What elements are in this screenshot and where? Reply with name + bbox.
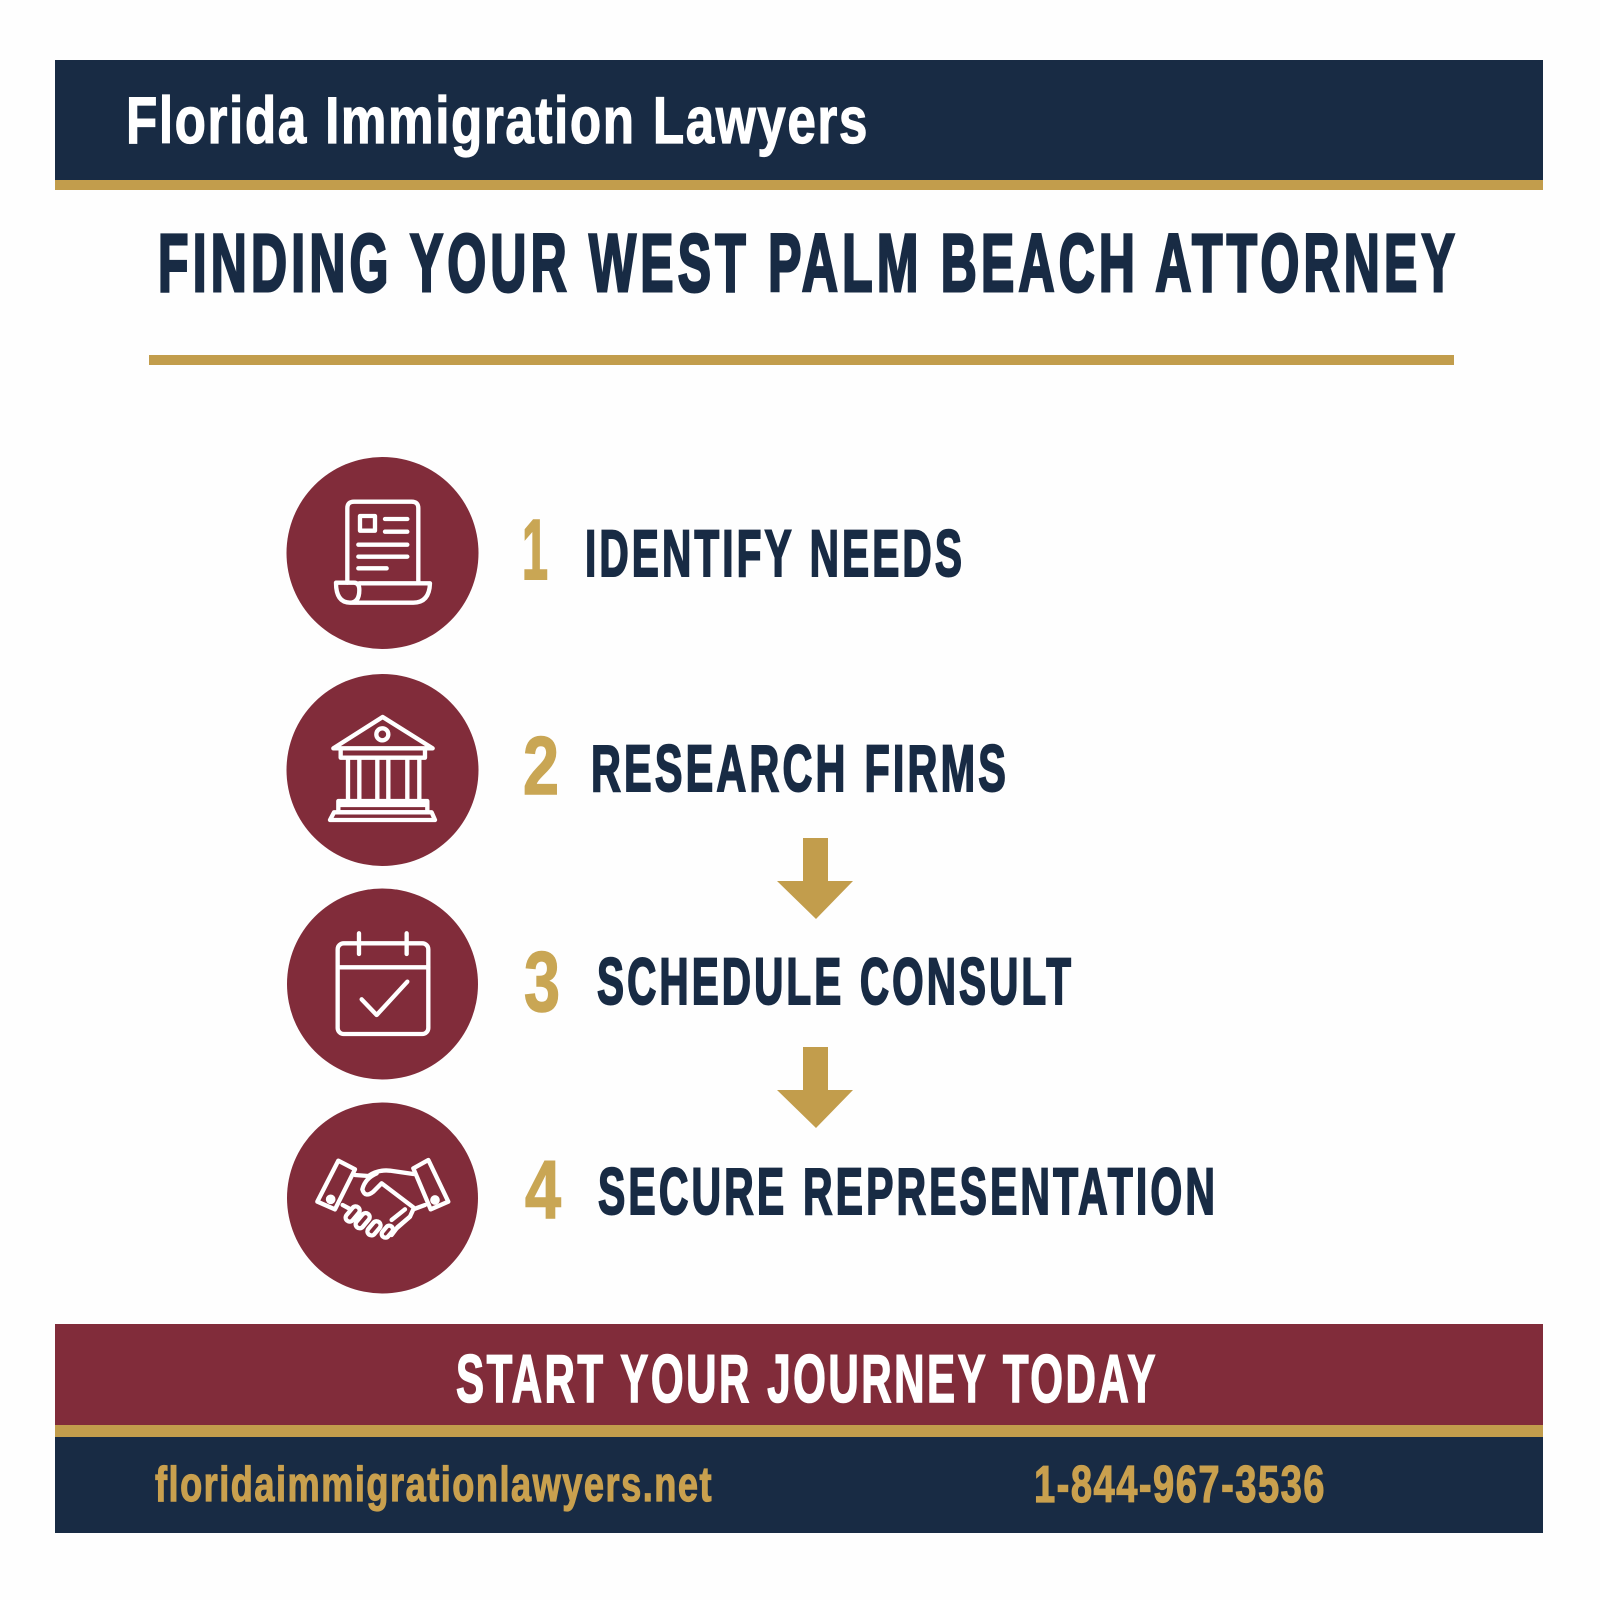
arrow: step 3 to 4	[777, 1047, 853, 1128]
step 1	[286, 457, 965, 649]
label: research firms: RESEARCH FIRMS	[591, 731, 1009, 805]
number 2: 2	[523, 719, 559, 812]
label: secure representation: SECURE REPRESENTATION	[598, 1154, 1218, 1228]
icon: handshake	[287, 1102, 478, 1294]
header banner	[55, 60, 1543, 190]
icon: document scroll	[286, 457, 478, 649]
number 1: 1	[522, 503, 548, 598]
call to action text: START YOUR JOURNEY TODAY	[456, 1341, 1158, 1417]
label: schedule consult: SCHEDULE CONSULT	[597, 944, 1074, 1018]
step 2	[286, 674, 1009, 866]
title underline	[149, 355, 1454, 365]
arrow: step 2 to 3	[777, 838, 853, 919]
brand name: Florida Immigration Lawyers	[126, 83, 869, 157]
contact footer	[55, 1437, 1543, 1533]
step 4	[287, 1102, 1218, 1294]
number 3: 3	[524, 935, 560, 1030]
website: floridaimmigrationlawyers.net	[155, 1458, 713, 1512]
icon: calendar with check	[287, 888, 478, 1080]
step 3	[287, 888, 1074, 1080]
gold divider band	[55, 1425, 1543, 1437]
label: identify needs: IDENTIFY NEEDS	[585, 516, 965, 590]
icon: courthouse	[286, 674, 478, 866]
phone number: 1-844-967-3536	[1034, 1456, 1326, 1514]
call to action banner	[55, 1324, 1543, 1425]
number 4: 4	[525, 1143, 561, 1236]
